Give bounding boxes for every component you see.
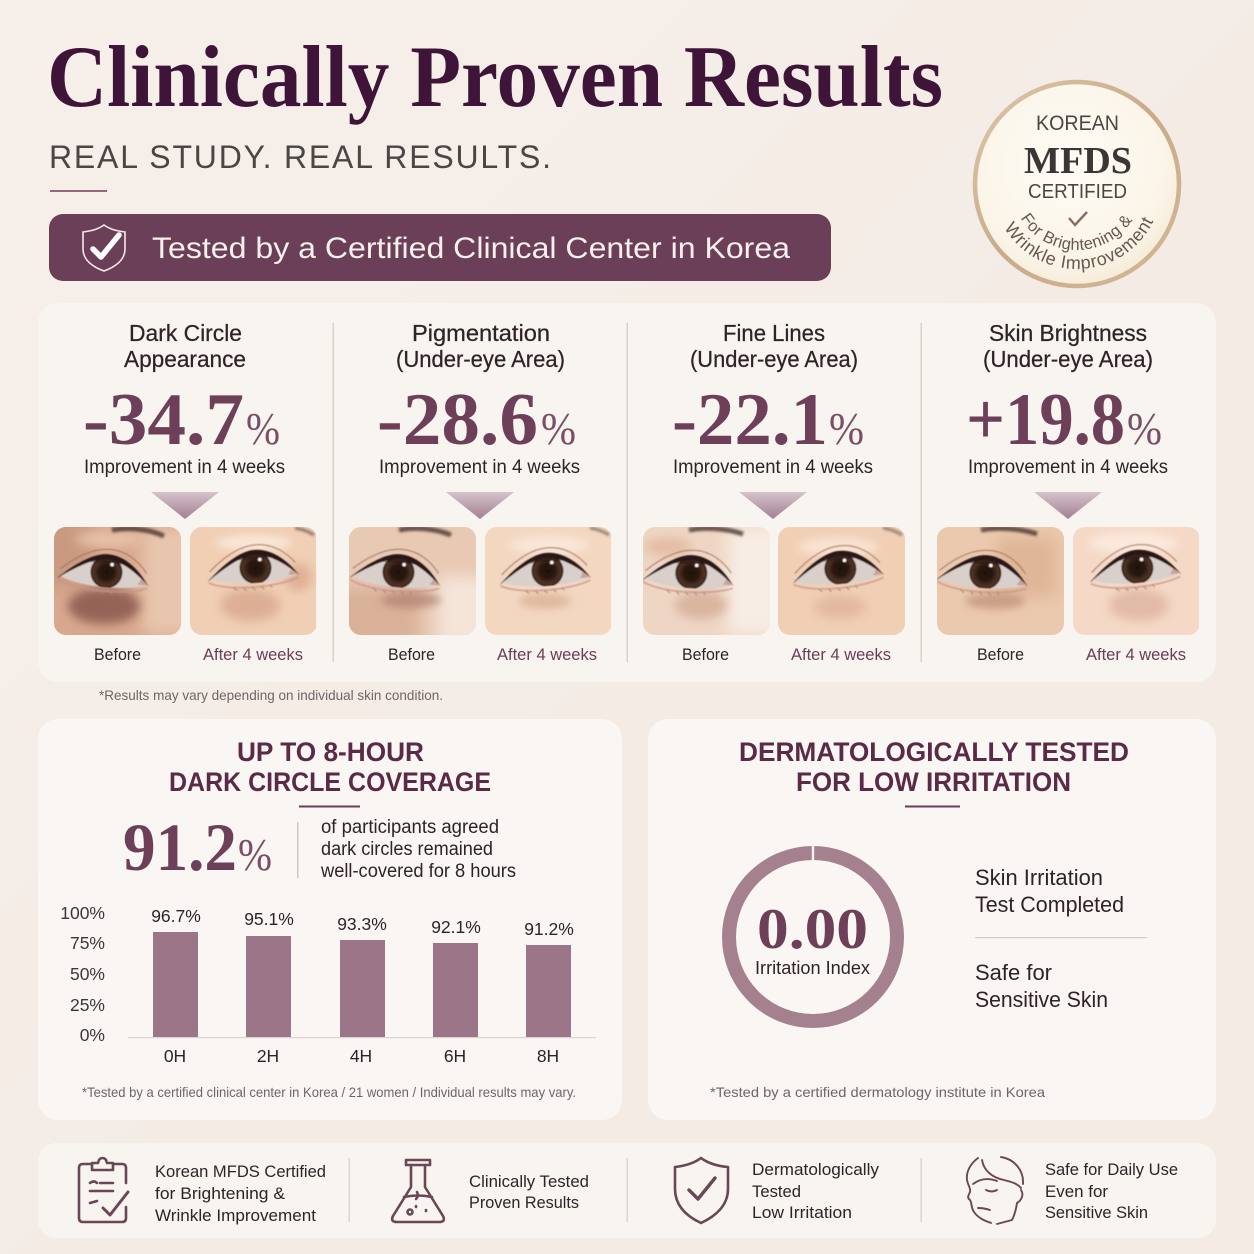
bar chart: coverage by hour: 0% bbox=[80, 1025, 105, 1045]
result: fine lines: -22.1 bbox=[672, 379, 828, 461]
result: dark circle appearance: Improvement in 4 weeks bbox=[84, 457, 285, 478]
claim: safe for sensitive skin: Safe for bbox=[975, 960, 1052, 985]
result: skin brightness: (Under-eye Area) bbox=[983, 346, 1153, 372]
result: fine lines: Fine Lines bbox=[723, 320, 825, 346]
irritation heading bbox=[739, 737, 1129, 808]
badge: Korean MFDS certified: CERTIFIED bbox=[1028, 181, 1127, 203]
result: pigmentation: % bbox=[541, 403, 576, 454]
coverage heading: DARK CIRCLE COVERAGE bbox=[169, 767, 491, 797]
subtitle: REAL STUDY. REAL RESULTS. bbox=[49, 139, 551, 175]
badge: Korean MFDS certified: KOREAN bbox=[1036, 112, 1119, 135]
icon: shield check bbox=[83, 225, 125, 271]
bar chart: coverage by hour: 8H bbox=[537, 1046, 559, 1066]
result: skin brightness: Skin Brightness bbox=[989, 320, 1147, 346]
claim: skin irritation test completed: Skin Irritation bbox=[975, 865, 1103, 890]
bar chart: coverage by hour bbox=[60, 903, 596, 1066]
photo: after, dark circle bbox=[190, 527, 316, 635]
banner text: Tested by a Certified Clinical Center in Korea bbox=[152, 232, 790, 265]
result: skin brightness bbox=[935, 320, 1199, 664]
text: clinically tested: Clinically Tested bbox=[469, 1172, 589, 1191]
result: pigmentation: Improvement in 4 weeks bbox=[379, 457, 580, 478]
claim: skin irritation test completed: Test Completed bbox=[975, 892, 1124, 917]
photo: after, skin brightness bbox=[1073, 527, 1199, 635]
bar chart: coverage by hour: 92.1% bbox=[431, 917, 481, 937]
statistic description: well-covered for 8 hours bbox=[320, 861, 516, 882]
ring chart: irritation index 0.00: Irritation Index bbox=[755, 958, 870, 978]
result: pigmentation: Pigmentation bbox=[412, 320, 550, 346]
bar chart: coverage by hour: 50% bbox=[70, 964, 105, 984]
bar chart: coverage by hour: 4H bbox=[350, 1046, 372, 1066]
text: dermatologically tested bbox=[752, 1160, 879, 1222]
coverage heading bbox=[169, 737, 491, 808]
bar chart: coverage by hour: 95.1% bbox=[244, 909, 294, 929]
statistic: 91.2%: % bbox=[238, 829, 272, 880]
irritation heading: FOR LOW IRRITATION bbox=[796, 767, 1071, 797]
coverage heading: UP TO 8-HOUR bbox=[237, 737, 424, 767]
ring chart: irritation index 0.00 bbox=[729, 843, 897, 1021]
panel: 8-hour coverage bbox=[38, 719, 622, 1120]
bar chart: coverage by hour: 91.2% bbox=[524, 919, 574, 939]
footnote: coverage study: *Tested by a certified clinical center in Korea / 21 women / Individual results may vary. bbox=[82, 1084, 576, 1100]
badge: Korean MFDS certified: For Brightening & bbox=[1021, 212, 1132, 252]
panel: low irritation bbox=[648, 719, 1216, 1120]
result: fine lines: Before bbox=[682, 646, 729, 664]
icon: clipboard bbox=[79, 1158, 128, 1222]
result: dark circle appearance bbox=[34, 320, 316, 664]
text: MFDS certified: Korean MFDS Certified bbox=[155, 1162, 326, 1181]
text: safe for daily use bbox=[1045, 1160, 1178, 1222]
result: skin brightness: +19.8 bbox=[966, 379, 1125, 461]
result: fine lines: After 4 weeks bbox=[791, 646, 891, 664]
text: dermatologically tested: Low Irritation bbox=[752, 1203, 852, 1222]
result: pigmentation: (Under-eye Area) bbox=[396, 346, 565, 372]
result: dark circle appearance: Before bbox=[94, 646, 141, 664]
badge: Korean MFDS certified bbox=[972, 80, 1182, 288]
bar chart: coverage by hour: 93.3% bbox=[337, 914, 387, 934]
claim: skin irritation test completed bbox=[975, 865, 1124, 917]
result: fine lines bbox=[641, 320, 905, 664]
result: skin brightness: Before bbox=[977, 646, 1024, 664]
banner: certified clinical center bbox=[49, 214, 831, 281]
photo: after, pigmentation bbox=[485, 527, 611, 635]
result: dark circle appearance: Appearance bbox=[124, 346, 246, 372]
bar chart: coverage by hour: 75% bbox=[70, 933, 105, 953]
ring chart: irritation index 0.00: 0.00 bbox=[757, 898, 868, 961]
result: fine lines: Improvement in 4 weeks bbox=[673, 457, 873, 478]
icon: shield check bbox=[675, 1158, 728, 1223]
icon: flask bbox=[392, 1160, 444, 1222]
title: Clinically Proven Results bbox=[47, 29, 943, 126]
text: safe for daily use: Sensitive Skin bbox=[1045, 1203, 1148, 1222]
bar chart: coverage by hour: 6H bbox=[444, 1046, 466, 1066]
bar chart: coverage by hour: 0H bbox=[164, 1046, 186, 1066]
statistic description bbox=[320, 817, 516, 882]
result: skin brightness: After 4 weeks bbox=[1086, 646, 1186, 664]
result: skin brightness: % bbox=[1127, 403, 1162, 454]
bar chart: coverage by hour: 2H bbox=[257, 1046, 279, 1066]
photo: before, fine lines bbox=[643, 527, 770, 635]
text: dermatologically tested: Tested bbox=[752, 1182, 801, 1201]
result: dark circle appearance: -34.7 bbox=[83, 379, 244, 461]
result: pigmentation: -28.6 bbox=[377, 379, 538, 461]
text: clinically tested bbox=[469, 1172, 589, 1212]
result: skin brightness: Improvement in 4 weeks bbox=[968, 457, 1168, 478]
icon: face bbox=[967, 1157, 1023, 1224]
bar chart: coverage by hour: 96.7% bbox=[151, 906, 201, 926]
result: dark circle appearance: After 4 weeks bbox=[203, 646, 303, 664]
result: pigmentation bbox=[329, 320, 611, 664]
text: dermatologically tested: Dermatologically bbox=[752, 1160, 879, 1179]
subtitle rule bbox=[50, 190, 107, 192]
bar chart: coverage by hour: 25% bbox=[70, 995, 105, 1015]
footnote: dermatology institute: *Tested by a certified dermatology institute in Korea bbox=[710, 1084, 1045, 1100]
text: safe for daily use: Safe for Daily Use bbox=[1045, 1160, 1178, 1179]
badge: Korean MFDS certified: Wrinkle Improvement bbox=[1006, 217, 1154, 273]
photo: before, dark circle bbox=[54, 527, 181, 635]
result: fine lines: % bbox=[829, 403, 864, 454]
badge: Korean MFDS certified: MFDS bbox=[1024, 140, 1132, 182]
panel: trust strip bbox=[38, 1143, 1216, 1238]
text: MFDS certified bbox=[155, 1162, 326, 1225]
result: dark circle appearance: Dark Circle bbox=[129, 320, 242, 346]
panel: four clinical results bbox=[34, 303, 1216, 682]
result: pigmentation: Before bbox=[388, 646, 435, 664]
text: MFDS certified: for Brightening & bbox=[155, 1184, 286, 1203]
result: fine lines: (Under-eye Area) bbox=[690, 346, 858, 372]
footnote: results may vary: *Results may vary depending on individual skin condition. bbox=[99, 687, 443, 703]
result: pigmentation: After 4 weeks bbox=[497, 646, 597, 664]
statistic description: dark circles remained bbox=[321, 839, 493, 860]
photo: before, pigmentation bbox=[349, 527, 476, 635]
bar chart: coverage by hour: 100% bbox=[60, 903, 105, 923]
photo: before, skin brightness bbox=[935, 527, 1064, 635]
claim: safe for sensitive skin bbox=[975, 960, 1108, 1012]
claim: safe for sensitive skin: Sensitive Skin bbox=[975, 987, 1108, 1012]
irritation heading: DERMATOLOGICALLY TESTED bbox=[739, 737, 1129, 767]
text: MFDS certified: Wrinkle Improvement bbox=[155, 1206, 316, 1225]
statistic: 91.2%: 91.2 bbox=[123, 809, 237, 885]
statistic description: of participants agreed bbox=[321, 817, 499, 838]
result: dark circle appearance: % bbox=[246, 403, 280, 454]
photo: after, fine lines bbox=[778, 527, 905, 635]
text: clinically tested: Proven Results bbox=[469, 1193, 579, 1212]
text: safe for daily use: Even for bbox=[1045, 1182, 1108, 1201]
